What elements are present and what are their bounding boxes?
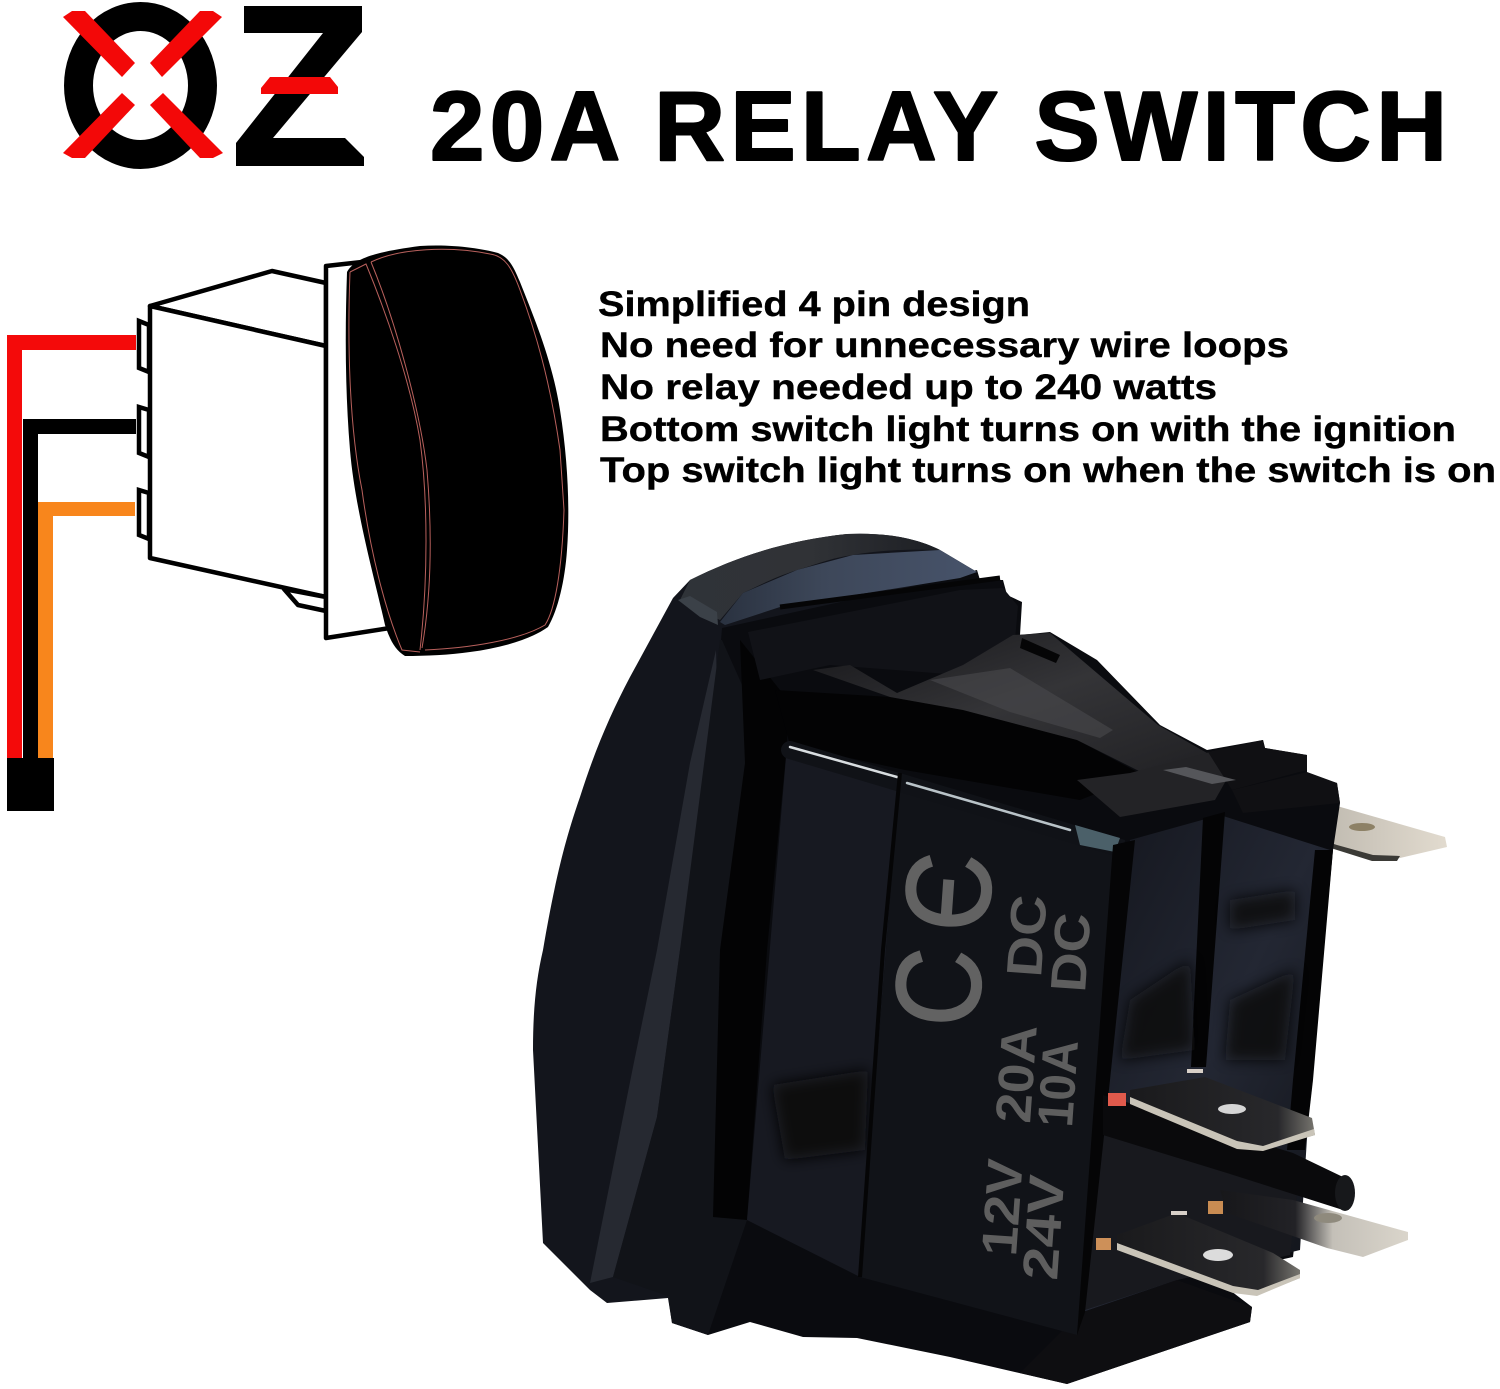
top blade terminal	[1243, 806, 1447, 861]
front face left panel	[747, 745, 900, 1277]
voltage and amperage ratings: DC	[996, 893, 1058, 979]
red wire	[7, 335, 136, 758]
CE mark	[869, 849, 1018, 1031]
corner highlight	[1075, 825, 1120, 852]
mounting flange and housing silhouette	[668, 570, 1340, 1384]
logo red bar	[261, 77, 338, 94]
black wire	[23, 419, 136, 758]
feature list text: Top switch light turns on when the switch is on	[600, 451, 1496, 490]
feature list text: No need for unnecessary wire loops	[600, 326, 1289, 365]
lower left blade terminal	[1096, 1211, 1300, 1296]
front face left panel shadow	[772, 1070, 868, 1160]
CE mark: Є	[879, 849, 1018, 936]
orange wire	[38, 502, 135, 758]
rocker side reflective strip	[590, 650, 719, 1283]
terminal tabs	[139, 321, 149, 539]
voltage and amperage ratings: DC	[1040, 911, 1101, 994]
black center pin	[1103, 1095, 1355, 1211]
logo: OZ	[63, 6, 364, 166]
switch side wall	[1080, 815, 1330, 1313]
feature list text	[598, 285, 1496, 490]
front face right panel	[860, 773, 1125, 1335]
side wall dark stripes	[1174, 812, 1333, 1210]
switch product photo	[533, 534, 1447, 1384]
logo letter O ring	[78, 16, 202, 154]
rocker corner highlight	[678, 596, 718, 625]
rocker cap black	[346, 245, 568, 656]
CE mark: C	[869, 944, 1008, 1031]
logo red X	[63, 11, 223, 158]
switch body outline	[150, 262, 400, 638]
bottom plate	[1020, 1280, 1252, 1384]
switch line drawing	[139, 245, 568, 656]
rocker top cap band	[680, 534, 940, 620]
front face glossy edge	[790, 747, 1113, 846]
voltage and amperage ratings: 24V	[1012, 1172, 1075, 1282]
wire connector block	[7, 758, 54, 811]
voltage and amperage ratings	[971, 893, 1101, 1282]
voltage and amperage ratings: 10A	[1027, 1038, 1089, 1129]
rocker top blue highlight	[720, 550, 977, 625]
rocker seam red lines	[349, 249, 564, 652]
black recess beneath clip	[775, 690, 1143, 800]
logo letter Z	[236, 6, 364, 166]
feature list text: Bottom switch light turns on with the ignition	[600, 410, 1456, 449]
middle blade terminal	[1108, 1069, 1315, 1151]
feature list text: Simplified 4 pin design	[598, 285, 1030, 324]
top clip detail	[813, 633, 1340, 817]
flange lower-left dark section	[613, 640, 777, 1335]
side wall reflections	[1120, 890, 1295, 1060]
title: 20A RELAY SWITCH	[430, 71, 1447, 181]
lower right blade terminal	[1208, 1190, 1408, 1257]
front face divider	[860, 773, 900, 1277]
lower side wall shadow	[1085, 1100, 1300, 1310]
flange top ledge line	[780, 578, 1000, 607]
flange black band	[713, 640, 788, 1220]
flange top surface	[748, 588, 1018, 680]
voltage and amperage ratings: 20A	[985, 1023, 1048, 1125]
face right edge strip	[1077, 840, 1135, 1335]
wiring diagram	[7, 335, 136, 811]
rocker cap	[533, 534, 977, 1303]
feature list text: No relay needed up to 240 watts	[600, 368, 1217, 407]
voltage and amperage ratings: 12V	[971, 1156, 1034, 1258]
